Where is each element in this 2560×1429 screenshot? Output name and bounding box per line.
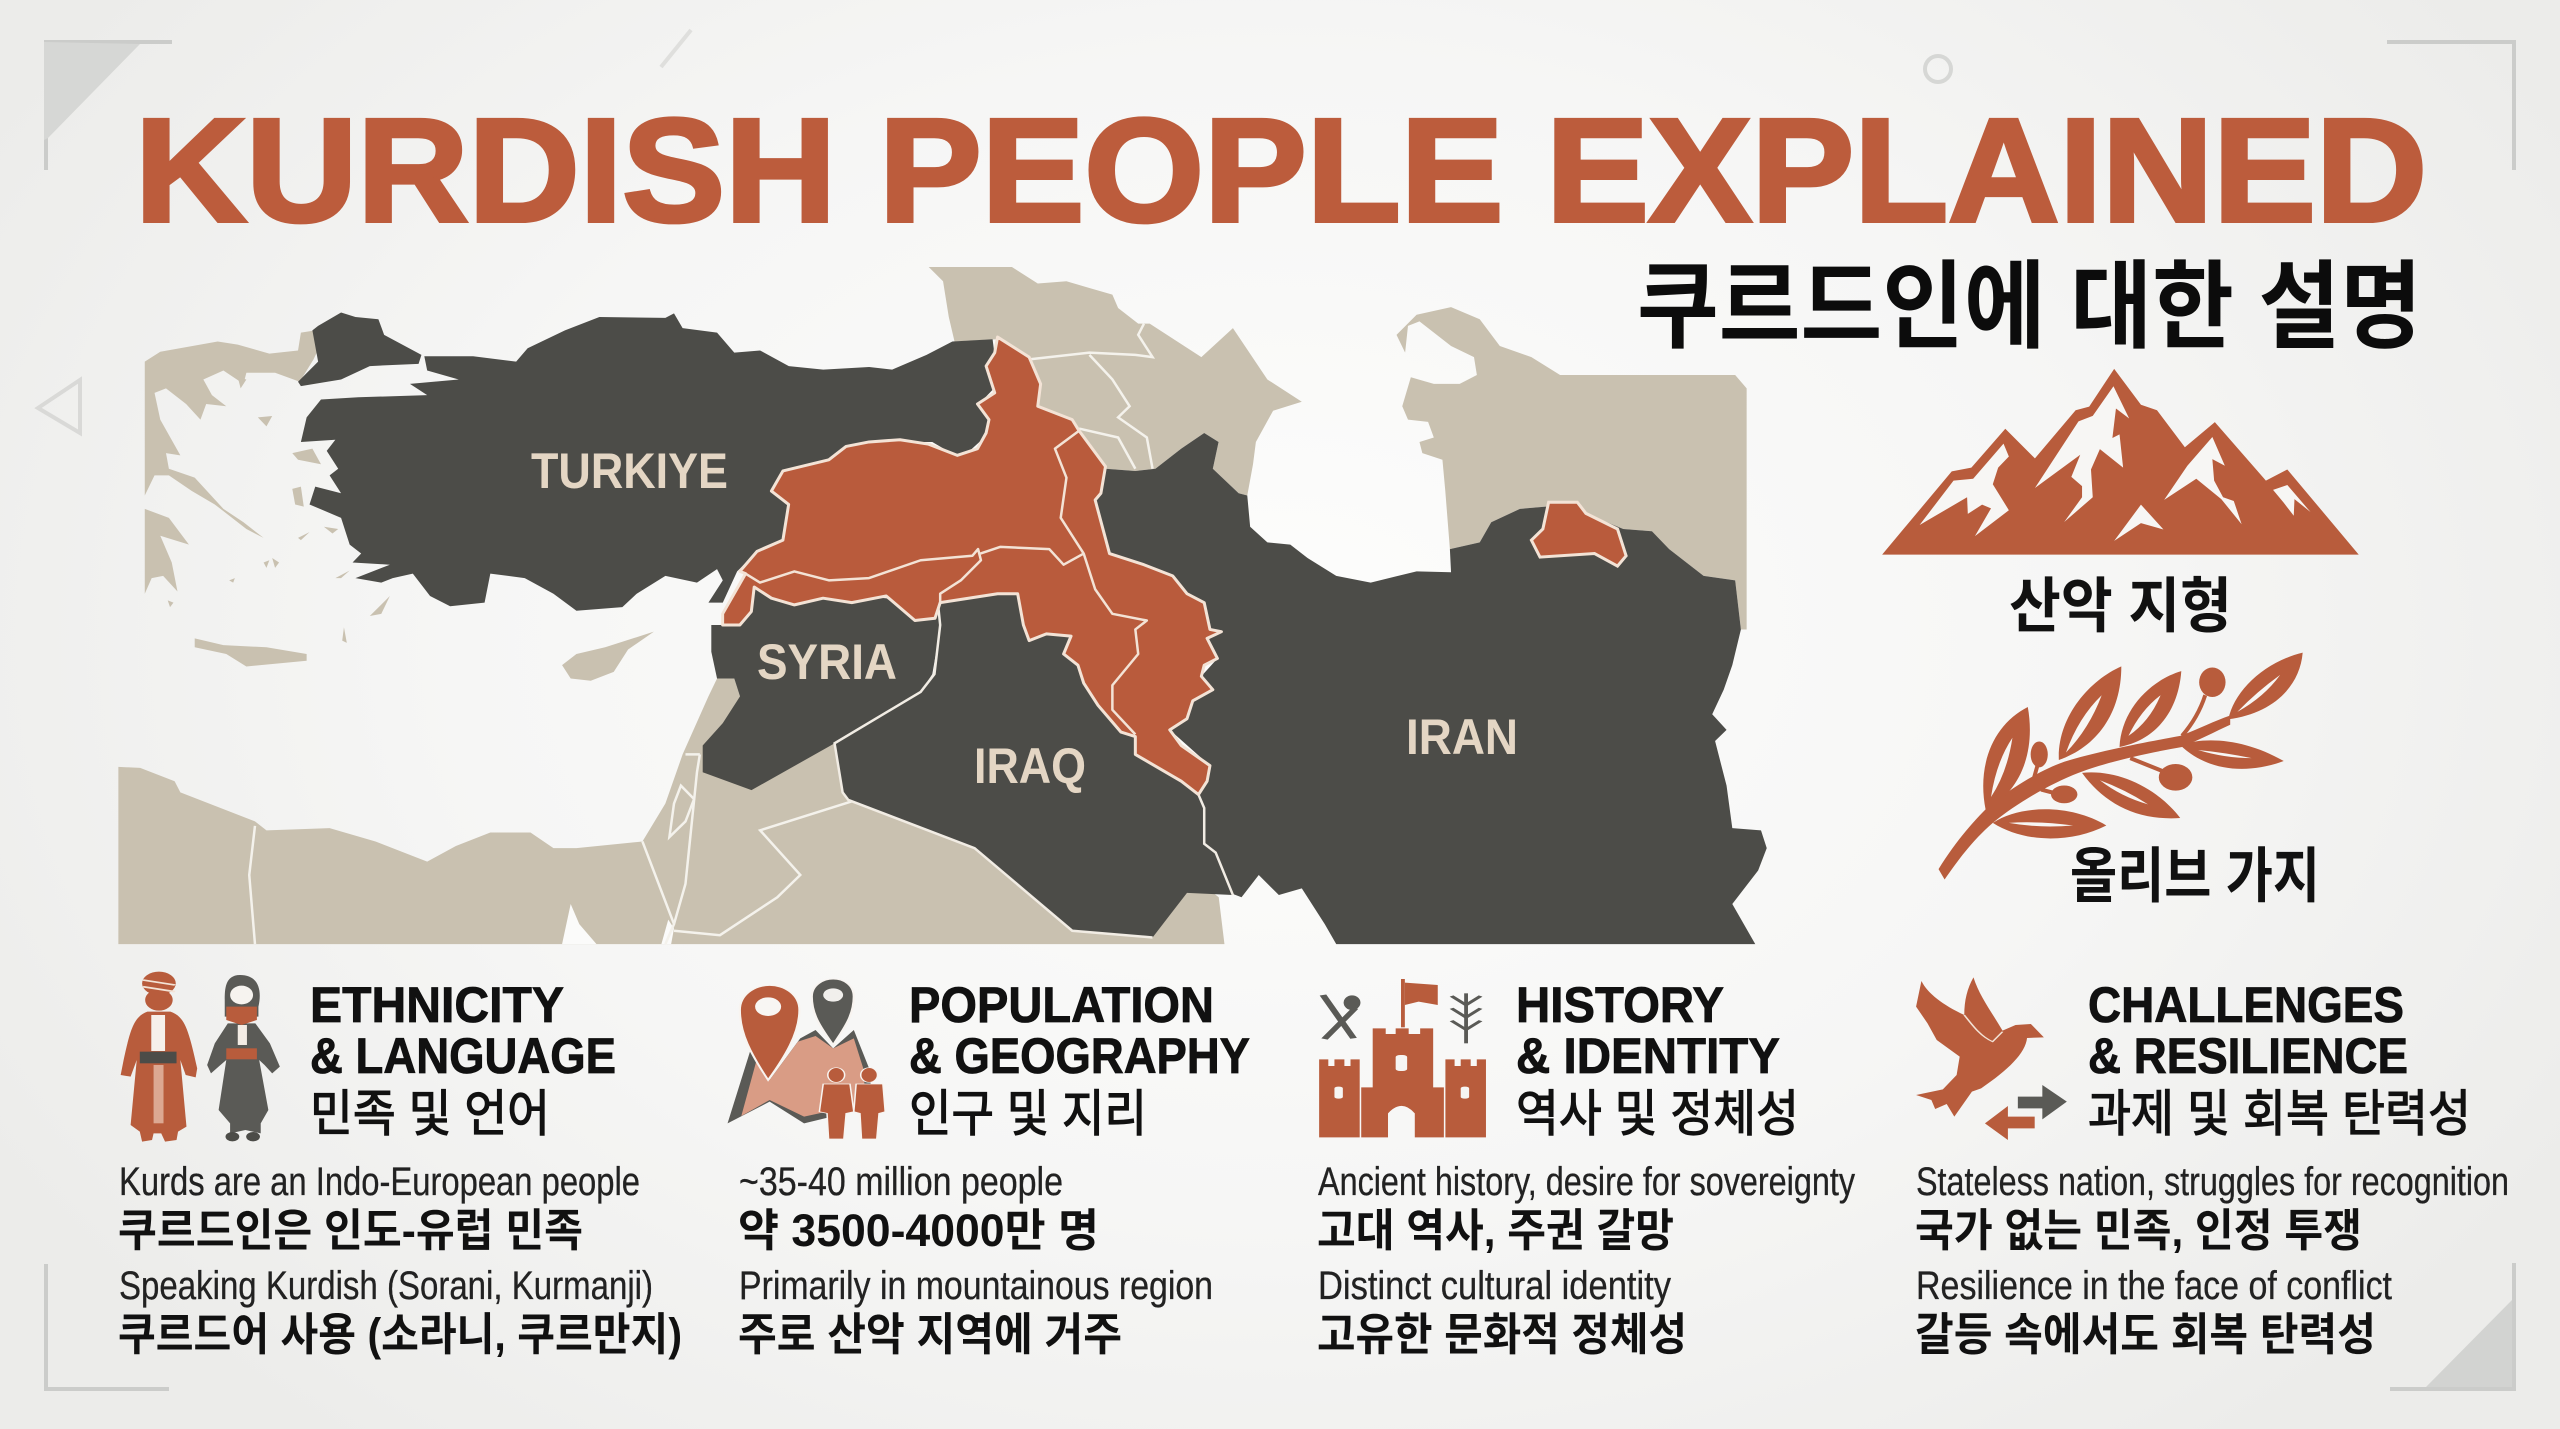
korean title: 쿠르드인에 대한 설명 [1637,254,2422,361]
map: water cut-outs [562,904,674,944]
label: olive branch: 올리브 가지 [2070,843,2320,910]
heading: population korean: 인구 및 지리 [909,1086,1147,1142]
map: surrounding countries west [118,330,1224,944]
heading: ethnicity korean: 민족 및 언어 [310,1086,550,1142]
corner decoration: bottom left [44,1264,169,1391]
icon: map pins with people [728,979,885,1139]
map: Kurdistan region [723,337,1221,795]
text: ethnicity line 2 korean: 쿠르드어 사용 (소라니, 쿠르만지) [118,1309,682,1360]
text: population line 1: ~35-40 million people [739,1160,1063,1204]
map: Iran [1095,433,1767,944]
map: Syria [703,587,941,790]
panel: population and geography [728,977,1250,1360]
panel: challenges and resilience [1915,977,2509,1360]
map: caucasus border lines [1029,324,1153,469]
text: challenges line 1 korean: 국가 없는 민족, 인정 투쟁 [1915,1205,2362,1256]
text: history line 2 korean: 고유한 문화적 정체성 [1317,1309,1687,1360]
label: mountainous terrain: 산악 지형 [2009,573,2232,640]
map label: Iraq: IRAQ [974,738,1086,794]
icon: man and woman in traditional dress [121,972,280,1142]
decoration: circle [1925,56,1951,82]
text: ethnicity line 2: Speaking Kurdish (Sorani, Kurmanji) [119,1264,653,1308]
text: ethnicity line 1: Kurds are an Indo-European people [119,1160,640,1204]
heading: ethnicity line 1: ETHNICITY [310,977,564,1033]
text: ethnicity line 1 korean: 쿠르드인은 인도-유럽 민족 [118,1205,583,1256]
icon: castle with flag [1319,979,1486,1137]
map: internal Kurdistan borders [746,431,1147,734]
decoration: triangle [38,380,80,433]
heading: challenges line 1: CHALLENGES [2088,977,2404,1033]
map [118,267,1767,944]
map: Turkiye [298,312,998,611]
heading: population line 2: & GEOGRAPHY [909,1028,1250,1084]
corner decoration: bottom right [2390,1263,2516,1391]
map label: Iran: IRAN [1406,709,1518,765]
map: border lines on tan [249,754,852,944]
heading: challenges line 2: & RESILIENCE [2088,1028,2408,1084]
heading: history line 1: HISTORY [1516,977,1724,1033]
text: history line 1: Ancient history, desire for sovereignty [1318,1160,1855,1204]
heading: history korean: 역사 및 정체성 [1516,1086,1799,1142]
text: history line 2: Distinct cultural identity [1318,1264,1671,1308]
title: KURDISH PEOPLE EXPLAINED [135,89,2427,253]
corner decoration: top left [44,40,172,170]
heading: ethnicity line 2: & LANGUAGE [310,1028,616,1084]
icon: mountains [1882,369,2359,555]
map label: Syria: SYRIA [757,634,897,690]
icon: dove with arrows [1916,977,2067,1140]
text: population line 2 korean: 주로 산악 지역에 거주 [738,1309,1122,1360]
text: history line 1 korean: 고대 역사, 주권 갈망 [1317,1205,1674,1256]
map: Iraq [835,594,1233,937]
decoration: slash [661,30,691,67]
text: challenges line 2 korean: 갈등 속에서도 회복 탄력성 [1915,1309,2376,1360]
text: population line 1 korean: 약 3500-4000만 명 [738,1205,1099,1256]
icon: olive branch [1939,653,2303,879]
heading: history line 2: & IDENTITY [1516,1028,1780,1084]
map: Syria Iraq border [835,603,1233,937]
map: surrounding countries east [929,267,1747,629]
map label: Turkiye: TURKIYE [531,443,728,499]
panel: history and identity [1317,977,1855,1360]
map: Khorasan Kurdish enclave [1531,502,1626,566]
panel: ethnicity and language [118,972,682,1360]
heading: challenges korean: 과제 및 회복 탄력성 [2088,1086,2471,1142]
corner decoration: top right [2387,40,2516,170]
heading: population line 1: POPULATION [909,977,1214,1033]
text: population line 2: Primarily in mountainous region [739,1264,1213,1308]
text: challenges line 2: Resilience in the face of conflict [1916,1264,2392,1308]
